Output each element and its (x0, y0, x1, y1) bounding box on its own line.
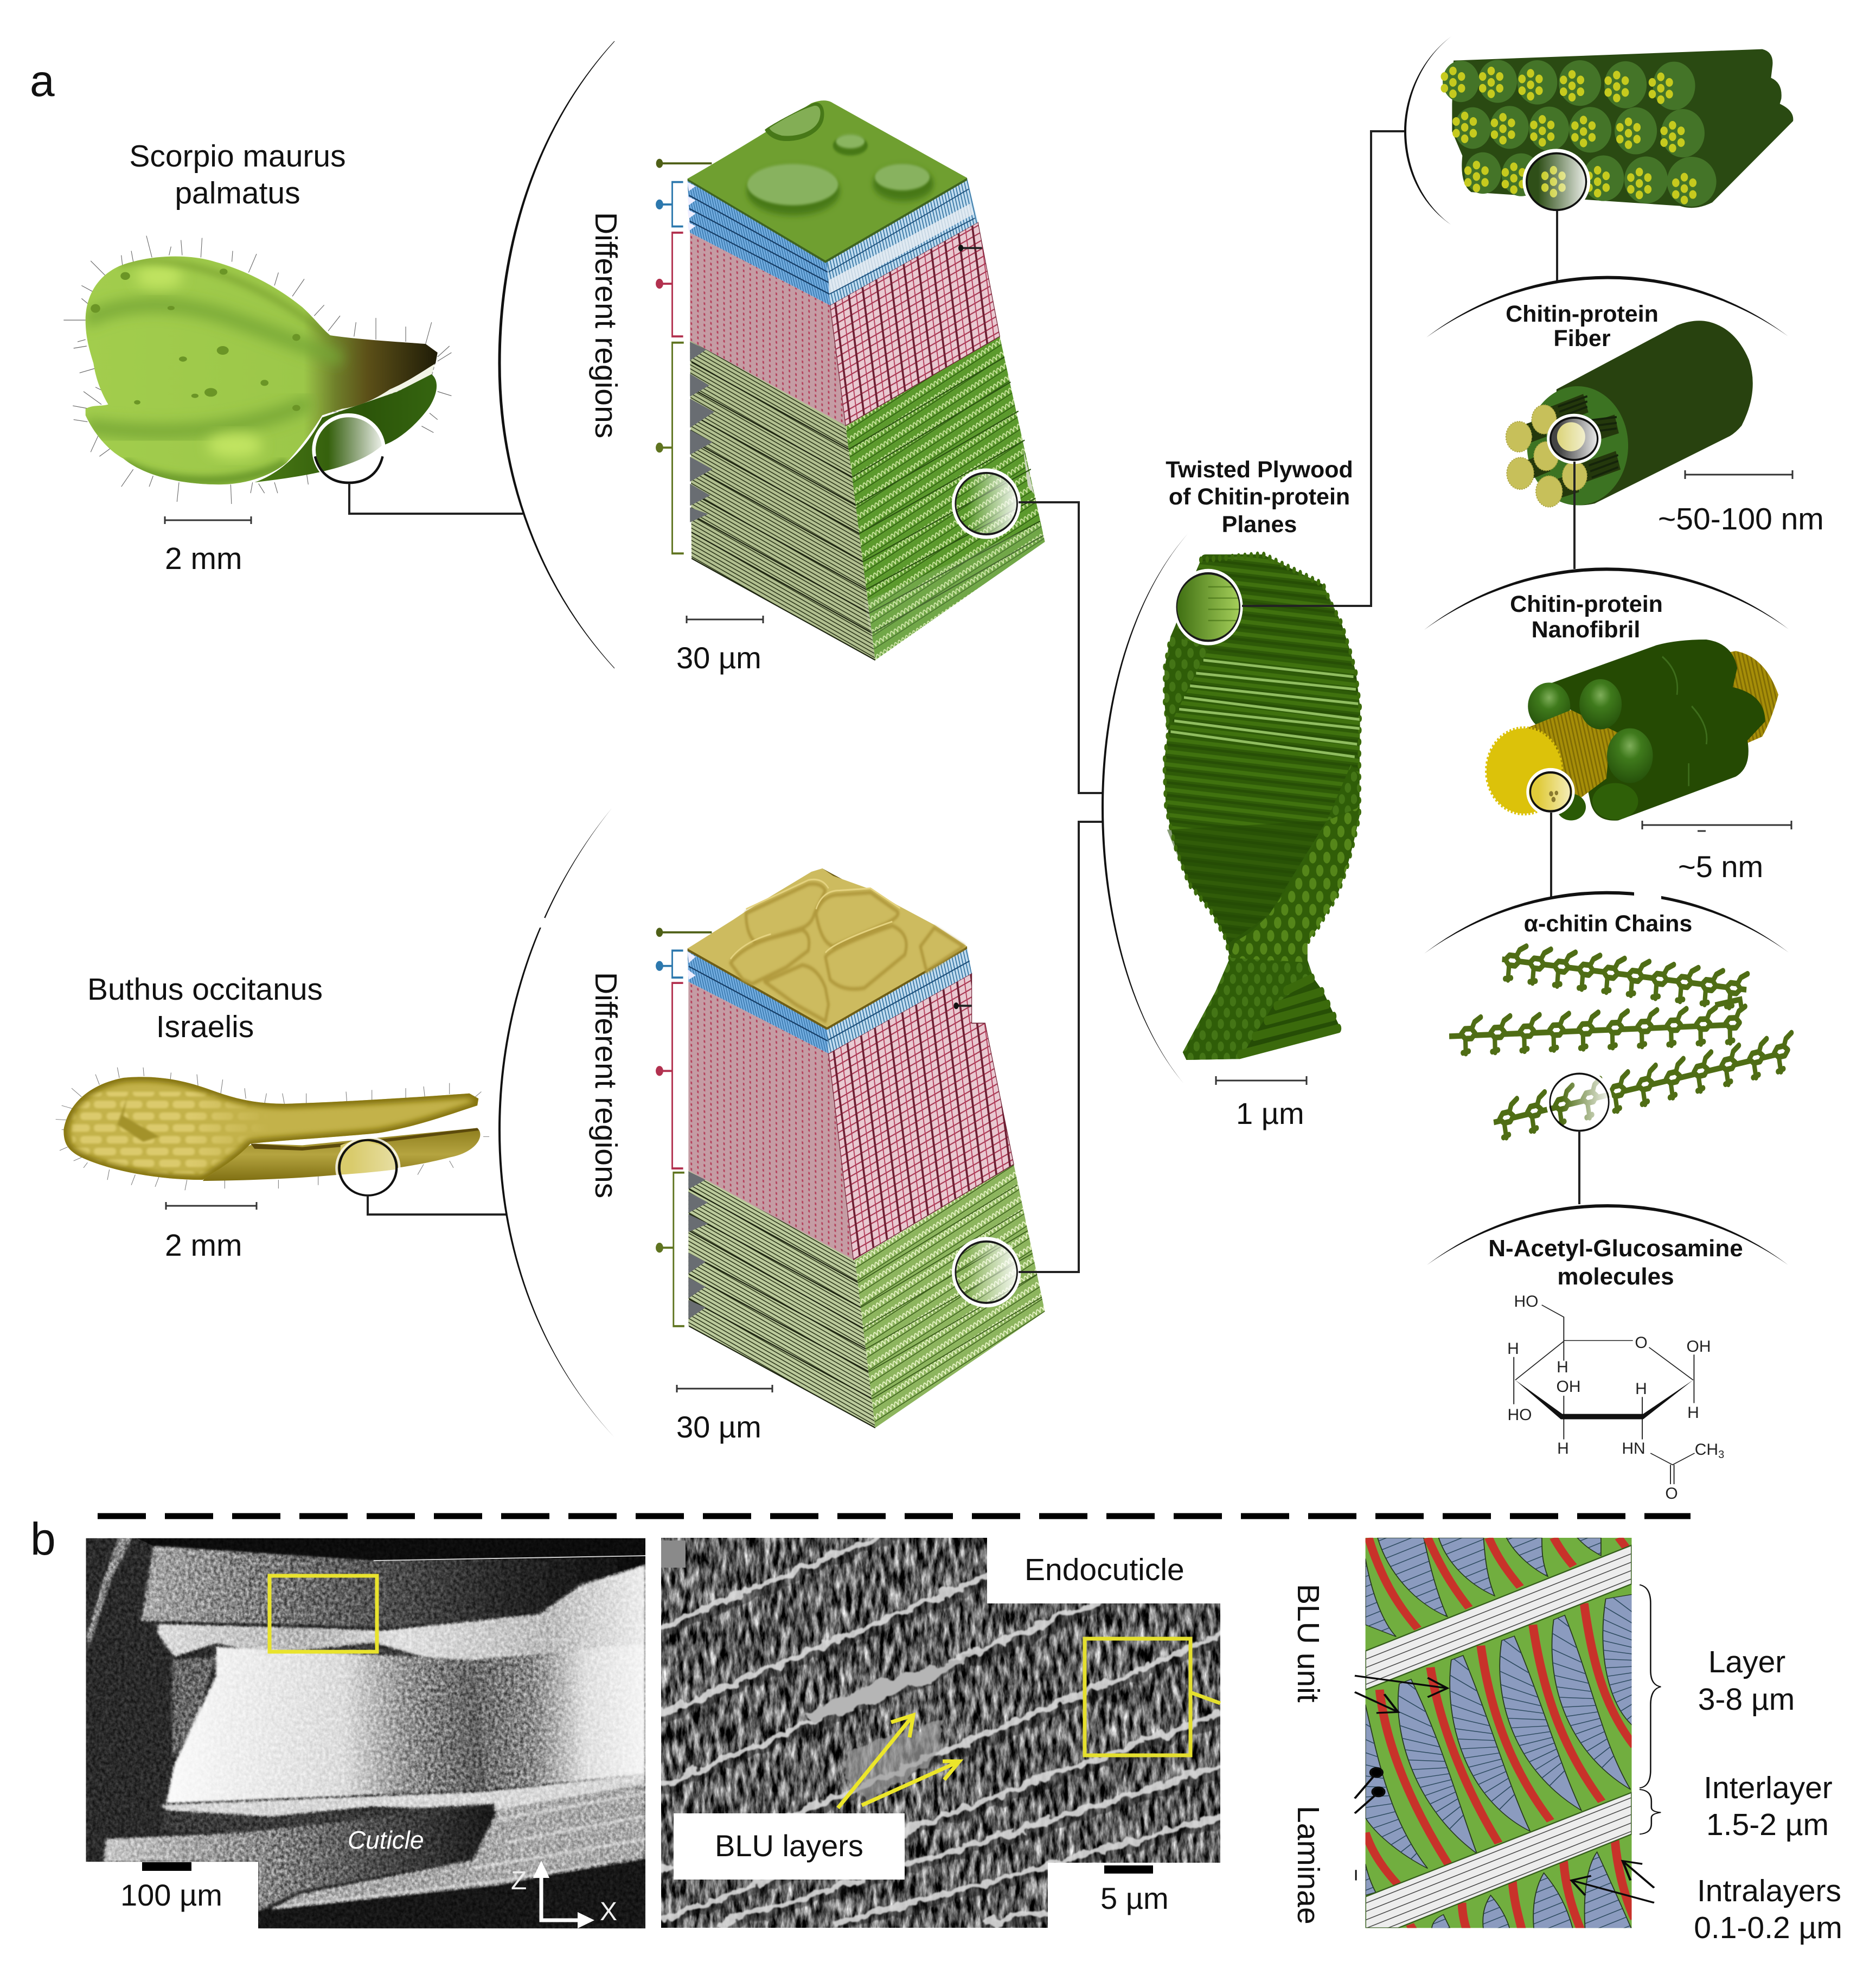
face: blue right (827, 947, 972, 1053)
layered diagram (1322, 1538, 1699, 1931)
scale bar 100 µm (120, 1862, 222, 1912)
arc above fiber (1426, 276, 1788, 337)
zoom lens on block (953, 1239, 1019, 1306)
scale bar 2 mm (165, 516, 251, 576)
atom labels: OH (1557, 1378, 1580, 1396)
atom labels: H (1507, 1340, 1519, 1358)
panel: Buthus occitanus claw (56, 972, 507, 1263)
heading: Chitin-protein Fiber: Fiber (1553, 325, 1611, 351)
axes z x: X (600, 1897, 617, 1926)
chain 2 (1449, 1006, 1746, 1054)
yellow arrows (838, 1715, 959, 1808)
pointers to laminae (1355, 1768, 1384, 1880)
artifact square (661, 1541, 686, 1568)
illustration: green scorpion claw (63, 236, 451, 504)
atom labels: HO (1514, 1293, 1538, 1311)
heading: twisted plywood: of Chitin-protein (1169, 484, 1350, 510)
heading: Chitin-protein Nanofibril: Nanofibril (1532, 617, 1640, 643)
panel: Scorpio maurus palmatus claw (63, 139, 523, 576)
label: intralayers thickness: 0.1-0.2 µm (1694, 1910, 1842, 1945)
scale bar 5 µm: 5 µm (1100, 1881, 1169, 1915)
connector to fiber bundle (1242, 131, 1406, 606)
SEM micrograph: endocuticle (661, 1535, 1220, 1928)
chemical structure: N-acetyl-glucosamine (1507, 1293, 1724, 1503)
highlight box (1085, 1639, 1190, 1755)
schematic drawing (1354, 1537, 1661, 1928)
panel: low magnification SEM image (86, 1538, 645, 1928)
atom labels: H (1557, 1358, 1568, 1376)
illustration: single chitin-protein fiber (1506, 321, 1753, 507)
chain 1 (1501, 943, 1747, 1009)
label: interlayer thickness: Interlayer (1704, 1771, 1833, 1805)
illustration: chitin chains (1449, 943, 1797, 1140)
zoom lens on claw (336, 1137, 399, 1198)
heading: Chitin-protein Fiber: Chitin-protein (1506, 301, 1659, 327)
heading: twisted plywood: Twisted Plywood (1166, 457, 1353, 483)
scale bar 1 µm (1216, 1076, 1307, 1130)
zoom lens on claw (314, 416, 384, 484)
face: blue right (827, 178, 978, 305)
zoom lens on bundle (1524, 151, 1589, 213)
scale bar 2 mm: 2 mm (165, 541, 242, 576)
connector to fiber (1556, 211, 1558, 280)
arc: zoom bracket to upper block (498, 41, 614, 668)
heading: species name: Scorpio maurus (129, 139, 346, 174)
scale bar ~5 nm (1642, 821, 1791, 884)
arc above nanofibril (1424, 567, 1789, 630)
scale bar 30 µm (676, 616, 763, 675)
atom labels: H (1635, 1380, 1647, 1398)
face: pink right (830, 222, 1000, 426)
scale bar 30 µm (676, 1385, 772, 1444)
illustration: yellow scorpion claw (56, 1068, 489, 1198)
face: green lower left (690, 341, 875, 660)
connector to cuticle block (349, 483, 523, 514)
panel: high magnification SEM image (661, 1535, 1220, 1928)
scale bar 5 µm (1100, 1865, 1169, 1915)
scale bar 100 µm: 100 µm (120, 1878, 222, 1912)
illustration: layered yellow block (656, 868, 1045, 1428)
brace: interlayer (1640, 1789, 1661, 1834)
illustration: twisted plywood helix (1164, 554, 1360, 1060)
scale bar 2 mm (165, 1202, 257, 1263)
arc: zoom bracket to plywood (1102, 534, 1188, 1084)
zoom lens on fiber (1548, 416, 1600, 462)
scale bar 30 µm: 30 µm (676, 641, 761, 675)
illustration: chitin-protein fiber bundle (1441, 49, 1793, 213)
atom labels: HN (1622, 1440, 1645, 1458)
face: blue left (688, 950, 829, 1053)
face: green lower right (846, 336, 1045, 660)
scale bar 2 mm: 2 mm (165, 1228, 242, 1263)
axes z x: Z (511, 1867, 527, 1895)
panel: twisted plywood (1164, 131, 1406, 1130)
label: layer thickness: Layer (1708, 1645, 1785, 1679)
atom labels: O (1635, 1334, 1648, 1352)
label: Different regions lower: Different regions (588, 972, 623, 1198)
heading: alpha-chitin chains: α-chitin Chains (1524, 911, 1692, 937)
scale bar ~50-100 nm (1658, 470, 1824, 536)
face: pink left (688, 982, 854, 1260)
scale bar ~50-100 nm: ~50-100 nm (1658, 502, 1824, 536)
atom labels: 3 (1718, 1449, 1724, 1461)
arc: zoom bracket to fiber bundle (1404, 36, 1451, 225)
label: BLU unit: BLU unit (1291, 1584, 1326, 1703)
panel label b: b (30, 1513, 56, 1564)
heading: species name: palmatus (175, 176, 300, 210)
label: interlayer thickness: 1.5-2 µm (1706, 1807, 1829, 1842)
label: layer thickness: 3-8 µm (1698, 1682, 1795, 1717)
axes z x (511, 1861, 617, 1928)
brace: layer (1640, 1585, 1661, 1788)
arrows to BLU unit (1355, 1676, 1448, 1713)
region brackets and markers (656, 159, 982, 553)
label: Endocuticle: Endocuticle (1025, 1552, 1184, 1587)
face: green lower left (688, 1171, 875, 1428)
atom labels (1507, 1293, 1724, 1503)
face: blue left (688, 181, 830, 305)
connector to N-acetyl-glucosamine (1578, 1130, 1580, 1204)
label: Laminae: Laminae (1291, 1806, 1326, 1925)
zoom lens on block (953, 470, 1019, 537)
arc: zoom bracket to lower block (498, 808, 614, 1437)
panel: lower cuticle block (656, 868, 1045, 1444)
atom labels: H (1557, 1440, 1569, 1458)
bonds (1514, 1305, 1695, 1484)
top plate with cells (688, 868, 967, 1030)
atom labels: O (1665, 1485, 1678, 1503)
dashed divider (98, 1513, 1691, 1519)
face: pink left (690, 233, 846, 426)
arc above N-acetyl-glucosamine (1427, 1204, 1788, 1265)
panel: upper cuticle block (656, 100, 1045, 675)
highlight box (270, 1576, 377, 1652)
connector to cuticle block (368, 1196, 507, 1215)
scale bar 1 µm: 1 µm (1236, 1096, 1304, 1130)
face: pink right (829, 974, 1014, 1260)
face: green lower right (855, 1164, 1045, 1428)
connector to nanofibril (1573, 462, 1576, 569)
illustration: layered green block (656, 100, 1045, 660)
heading: species name: Israelis (156, 1009, 254, 1044)
heading: N-Acetyl-Glucosamine molecules: molecules (1557, 1263, 1674, 1290)
label: Cuticle: Cuticle (348, 1826, 424, 1854)
callout: BLU layers: BLU layers (715, 1829, 863, 1863)
BLU lenses with radial lamellae (1322, 1578, 1699, 1886)
arrows to intralayers (1571, 1861, 1654, 1903)
chain 3 (1491, 1033, 1797, 1140)
yellow connector stub (1190, 1692, 1220, 1703)
atom labels: OH (1687, 1338, 1711, 1356)
label: intralayers thickness: Intralayers (1697, 1874, 1841, 1908)
heading: N-Acetyl-Glucosamine molecules: N-Acetyl-Glucosamine (1488, 1235, 1743, 1262)
heading: Chitin-protein Nanofibril: Chitin-protein (1510, 591, 1663, 617)
zoom lens on plywood (1175, 571, 1241, 643)
illustration: nanofibril (1487, 640, 1778, 821)
SEM micrograph: cuticle (86, 1538, 645, 1928)
scale bar 30 µm: 30 µm (676, 1410, 761, 1444)
callout: BLU layers (674, 1813, 905, 1880)
scale bar ~5 nm: ~5 nm (1678, 849, 1763, 884)
zoom lens on nanofibril (1528, 770, 1573, 814)
connectors from blocks to plywood (1019, 502, 1104, 1272)
atom labels: H (1687, 1404, 1699, 1422)
panel: BLU schematic (1291, 1538, 1842, 1945)
atom labels: HO (1508, 1406, 1532, 1424)
arc above chitin chains (1424, 890, 1789, 954)
top plate with craters (688, 100, 967, 263)
zoom lens on chains (1548, 1071, 1611, 1134)
label: Different regions upper: Different regions (588, 212, 623, 438)
heading: twisted plywood: Planes (1222, 512, 1297, 538)
panel label a: a (30, 56, 55, 106)
heading: species name: Buthus occitanus (87, 972, 323, 1007)
region brackets and markers (656, 928, 972, 1326)
connector to chitin chains (1550, 813, 1552, 897)
atom labels: CH (1695, 1441, 1718, 1459)
